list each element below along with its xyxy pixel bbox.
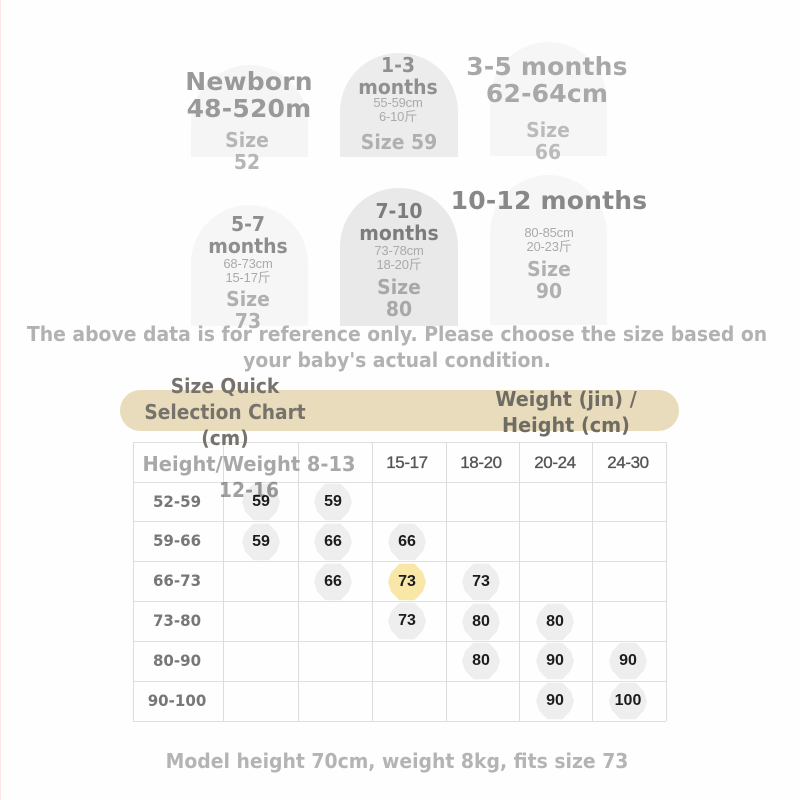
badge: 80 (472, 652, 490, 669)
table header: height/weight: Height/Weight 8-13 (143, 452, 355, 476)
table header: 18-20: 18-20 (460, 453, 502, 472)
size label: 66 (535, 140, 561, 164)
badge: 66 (324, 533, 342, 550)
badge: 66 (398, 533, 416, 550)
badge (536, 603, 574, 641)
banner title right (495, 387, 637, 437)
badge (462, 603, 500, 641)
size label (527, 257, 571, 303)
badge (536, 642, 574, 680)
measurements: 80-85cm (524, 225, 574, 240)
row label: 52-59 (153, 492, 201, 511)
size label (526, 118, 570, 164)
size label: Size (377, 275, 421, 299)
panel: 1-3 months (340, 53, 458, 157)
arch (490, 175, 607, 325)
badge (462, 642, 500, 680)
measurements: 15-17斤 (225, 270, 271, 285)
left edge strip (0, 0, 1, 800)
badge (242, 483, 280, 521)
size label: Size 59 (361, 130, 437, 154)
size chart table (133, 442, 667, 722)
age heading (185, 67, 313, 123)
arch (340, 53, 458, 157)
badge: 59 (324, 493, 342, 510)
banner title right: Weight (jin) / (495, 387, 637, 411)
badge: 59 (252, 493, 270, 510)
badge: 73 (472, 573, 490, 590)
badge (609, 642, 647, 680)
table header: 15-17: 15-17 (386, 453, 428, 472)
table header: 12-16: 12-16 (219, 478, 279, 502)
row label: 80-90 (153, 651, 201, 670)
badge: 90 (546, 692, 564, 709)
age heading: 10-12 months (451, 186, 647, 215)
row label: 66-73 (153, 571, 201, 590)
measurements: 6-10斤 (379, 109, 417, 124)
badge: 90 (619, 652, 637, 669)
banner (120, 390, 679, 431)
measurements (373, 95, 423, 124)
size label: 52 (234, 150, 260, 174)
age heading: Newborn (185, 67, 313, 96)
banner title left: Selection Chart (144, 400, 306, 424)
measurements: 68-73cm (223, 256, 273, 271)
row label: 73-80 (153, 611, 201, 630)
badge: highlighted (388, 563, 426, 601)
age heading: months (208, 234, 288, 258)
disclaimer text: your baby's actual condition. (243, 348, 551, 372)
badge: 66 (324, 573, 342, 590)
banner title left (144, 374, 306, 450)
row label: 90-100 (148, 691, 206, 710)
measurements (524, 225, 574, 254)
badge (462, 563, 500, 601)
age heading: 7-10 (375, 199, 423, 223)
badge: 59 (252, 533, 270, 550)
badge: 73 (398, 612, 416, 629)
badge (609, 682, 647, 720)
badge (388, 523, 426, 561)
age heading (359, 199, 439, 245)
age heading: months (358, 75, 438, 99)
banner title right: Height (cm) (502, 413, 630, 437)
badge (242, 523, 280, 561)
size label: Size (527, 257, 571, 281)
measurements: 18-20斤 (376, 257, 422, 272)
size label: 80 (386, 297, 412, 321)
panel: 7-10 months (340, 188, 458, 326)
measurements: 73-78cm (374, 243, 424, 258)
arch (191, 65, 308, 157)
disclaimer text: The above data is for reference only. Please choose the size based on (27, 322, 767, 346)
size label: 90 (536, 279, 562, 303)
panel: 3-5 months (466, 52, 628, 164)
badge (314, 563, 352, 601)
badge: 100 (615, 692, 641, 709)
badge: highlighted: 73 (398, 573, 416, 590)
age heading: 48-520m (187, 94, 311, 123)
size label: Size (526, 118, 570, 142)
size label: Size (226, 287, 270, 311)
measurements (223, 256, 273, 285)
panel: 5-7 months (208, 212, 288, 333)
age heading: 3-5 months (466, 52, 628, 81)
badge (388, 602, 426, 640)
size label (226, 287, 270, 333)
footer note: Model height 70cm, weight 8kg, fits size 73 (166, 749, 628, 773)
disclaimer text (27, 322, 767, 372)
age heading: 5-7 (231, 212, 265, 236)
badge: 80 (472, 613, 490, 630)
badge (314, 523, 352, 561)
size label (225, 128, 269, 174)
age heading: months (359, 221, 439, 245)
badge (314, 483, 352, 521)
arch (490, 42, 607, 156)
arch (340, 188, 458, 326)
age heading (208, 212, 288, 258)
banner title left: (cm) (201, 426, 249, 450)
arch (191, 205, 308, 326)
size label: Size (225, 128, 269, 152)
badge: 80 (546, 613, 564, 630)
measurements: 55-59cm (373, 95, 423, 110)
row label: 59-66 (153, 531, 201, 550)
badge (536, 682, 574, 720)
banner title left: Size Quick (171, 374, 279, 398)
age heading (466, 52, 628, 108)
age heading: 62-64cm (486, 79, 608, 108)
measurements: 20-23斤 (526, 239, 572, 254)
panel: newborn (185, 65, 313, 174)
size label: 73 (235, 309, 261, 333)
panel: 10-12 months (451, 186, 647, 303)
measurements (374, 243, 424, 272)
age heading (358, 53, 438, 99)
table header: 24-30: 24-30 (607, 453, 649, 472)
table header: 20-24: 20-24 (534, 453, 576, 472)
size label (377, 275, 421, 321)
badge: 90 (546, 652, 564, 669)
age heading: 1-3 (381, 53, 415, 77)
